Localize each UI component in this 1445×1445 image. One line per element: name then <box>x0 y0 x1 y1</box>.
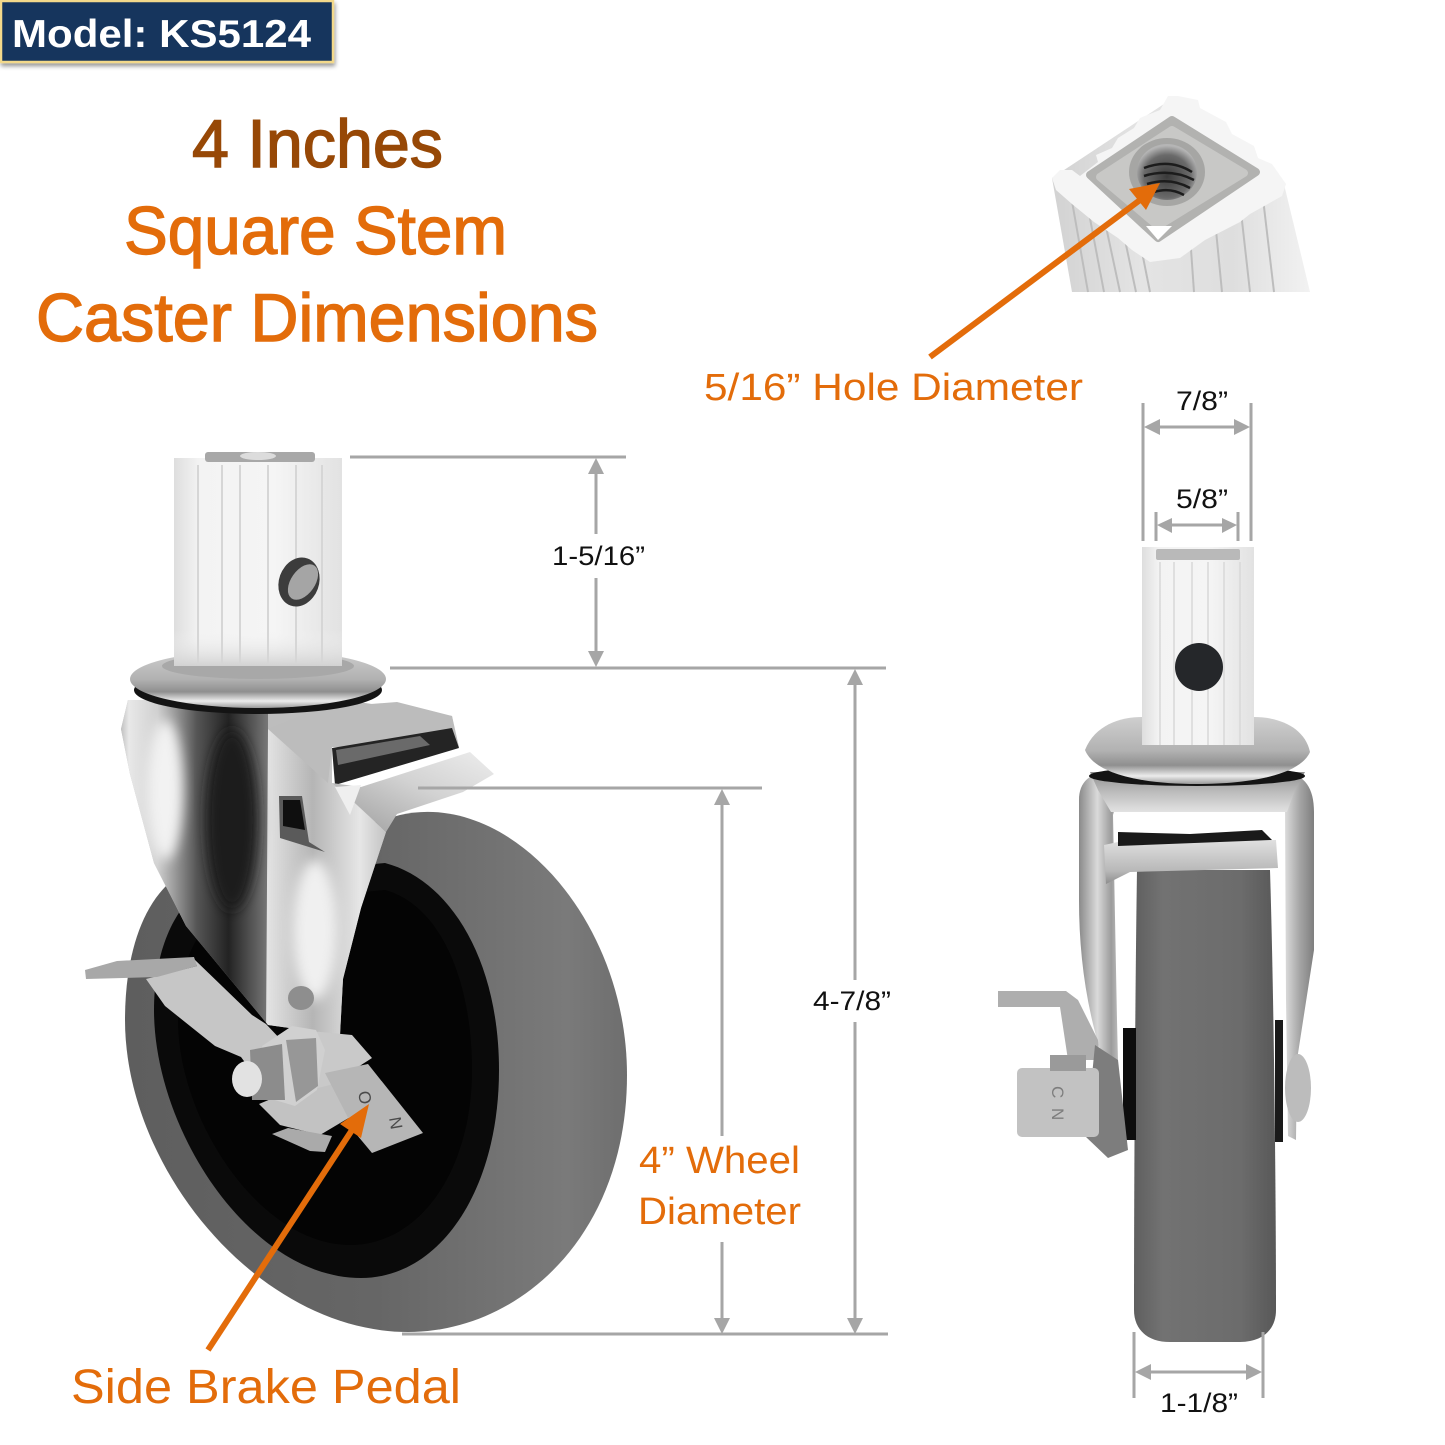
pedal tab <box>1086 1045 1128 1158</box>
fork crown <box>1090 772 1305 812</box>
stem <box>174 458 342 666</box>
brake plate <box>332 752 494 832</box>
top plate <box>268 702 459 783</box>
dimension: overall height <box>402 669 888 1334</box>
stem insert <box>1156 549 1240 560</box>
title: Square Stem <box>124 193 507 269</box>
photo: caster front view <box>998 547 1314 1342</box>
dimension: 7/8 <box>1143 403 1251 541</box>
stem bolt hole <box>272 552 326 612</box>
tab top <box>300 1030 372 1090</box>
right fork arm <box>1285 772 1314 1140</box>
photo: caster angled view: O <box>354 1089 375 1106</box>
photo: caster angled view: N <box>385 1115 406 1131</box>
model badge: Model: KS5124 <box>12 13 311 56</box>
brake lever <box>146 959 300 1110</box>
photo: caster front view: C <box>1048 1086 1067 1098</box>
arrow: side brake <box>208 1104 369 1350</box>
pedal tab <box>325 1064 423 1153</box>
fork window <box>279 796 325 852</box>
label: 1-1/8: 1-1/8” <box>1160 1388 1238 1418</box>
lower body <box>259 1070 357 1135</box>
right bolt cap <box>1285 1054 1311 1122</box>
photo: stem top close-up <box>1052 96 1310 292</box>
left fork arm <box>1079 772 1125 1150</box>
dimension: wheel diameter <box>418 788 762 1334</box>
label: wheel diameter: 4” Wheel <box>639 1140 800 1182</box>
rim <box>1052 96 1286 262</box>
flange <box>1089 766 1305 786</box>
rivet <box>288 986 314 1010</box>
fork body <box>121 700 452 1034</box>
title <box>36 106 598 356</box>
wheel <box>1134 870 1276 1342</box>
label: 7/8: 7/8” <box>1176 386 1228 416</box>
photo: caster front view: N <box>1048 1108 1067 1120</box>
lever <box>998 991 1100 1060</box>
model badge <box>1 1 333 62</box>
dimension: 5/8 <box>1156 512 1238 541</box>
stem hole <box>1175 643 1223 691</box>
arrow: hole diameter <box>930 183 1160 357</box>
label: 4-7/8: 4-7/8” <box>813 986 891 1016</box>
stem insert <box>205 452 315 462</box>
label: hole diameter: 5/16” Hole Diameter <box>704 367 1083 409</box>
tire <box>125 812 627 1332</box>
label: 5/8: 5/8” <box>1176 484 1228 514</box>
dimension: stem height <box>350 457 886 668</box>
label: 1-5/16: 1-5/16” <box>552 541 645 571</box>
label: wheel diameter: Diameter <box>638 1191 801 1233</box>
photo: caster angled view <box>85 452 627 1332</box>
label: side brake pedal: Side Brake Pedal <box>71 1361 461 1414</box>
title: 4 Inches <box>192 106 443 182</box>
axle nut <box>262 1026 325 1106</box>
brake band <box>1104 840 1278 884</box>
black hub <box>1123 1028 1136 1140</box>
label: wheel diameter <box>638 1140 801 1233</box>
dimension: 1-1/8 <box>1134 1332 1263 1398</box>
title: Caster Dimensions <box>36 280 598 356</box>
flange <box>134 666 382 714</box>
stem <box>1142 547 1254 745</box>
